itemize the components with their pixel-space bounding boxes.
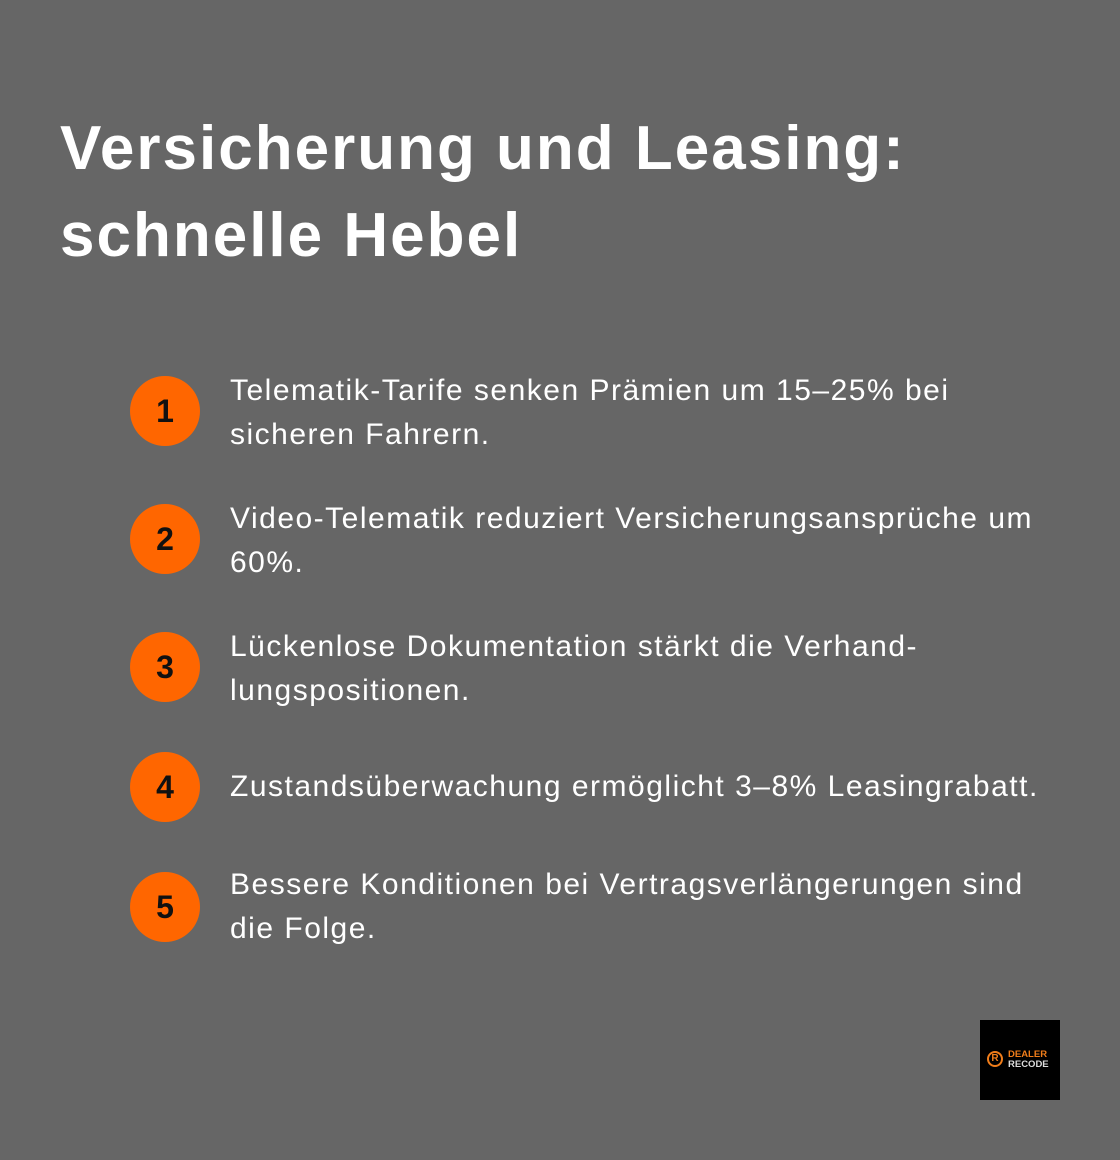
item 2: 2 — [156, 521, 174, 557]
title: Versicherung und Leasing: — [60, 114, 906, 183]
item 3: lungspositionen. — [230, 674, 471, 707]
item 2: Video-Telematik reduziert Versicherungsansprüche um — [230, 502, 1033, 535]
item 5: 5 — [156, 889, 174, 925]
logo: R — [991, 1053, 999, 1064]
item 1: Telematik-Tarife senken Prämien um 15–25% bei — [230, 374, 950, 407]
item 2: 60%. — [230, 546, 304, 579]
item 1: sicheren Fahrern. — [230, 418, 491, 451]
item 4 — [130, 752, 1039, 822]
title: schnelle Hebel — [60, 201, 522, 270]
item 2 — [130, 502, 1033, 579]
item 5: die Folge. — [230, 912, 377, 945]
item 3 — [130, 630, 918, 707]
item 1: 1 — [156, 393, 174, 429]
item 4: 4 — [156, 769, 174, 805]
item 3: 3 — [156, 649, 174, 685]
logo: DEALER — [1008, 1049, 1047, 1060]
item 4: Zustandsüberwachung ermöglicht 3–8% Leasingrabatt. — [230, 770, 1039, 803]
item 3: Lückenlose Dokumentation stärkt die Verhand- — [230, 630, 918, 663]
logo: RECODE — [1008, 1059, 1049, 1070]
item 5: Bessere Konditionen bei Vertragsverlängerungen sind — [230, 868, 1024, 901]
item 5 — [130, 868, 1024, 945]
title — [60, 114, 906, 270]
item 1 — [130, 374, 950, 451]
logo — [980, 1020, 1060, 1100]
